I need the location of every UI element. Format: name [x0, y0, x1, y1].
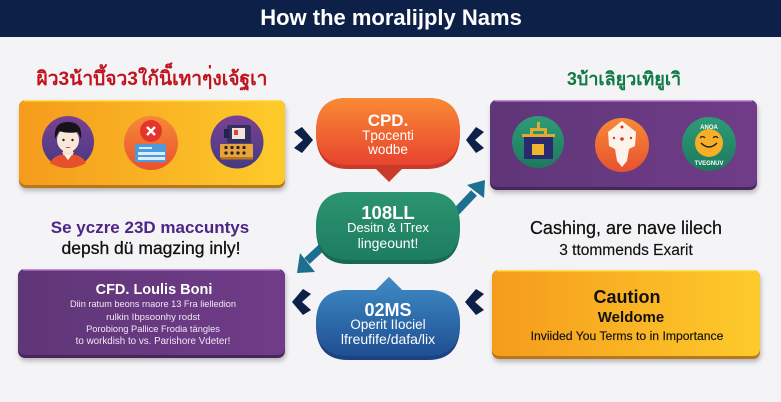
- icon: green shrine box: [512, 116, 564, 168]
- panel: lower right yellow caution: Inviided You Terms to in Importance: [531, 329, 724, 343]
- arrow: down left teal: [297, 247, 322, 273]
- bubble: blue 02MS: lfreufife/dafa/lix: [341, 331, 435, 347]
- heading: top right: 3บ้าเลิยูวเทิยูเาิ: [567, 69, 681, 91]
- panel: lower right yellow caution: [492, 270, 760, 359]
- bubble: orange CPD: wodbe: [367, 142, 408, 157]
- header bar with title: [0, 0, 781, 37]
- panel: top right purple with icons: [490, 100, 757, 190]
- panel: lower left purple: Porobiong Pallice Frodia tängles: [86, 324, 220, 334]
- icon: person: [42, 116, 94, 168]
- panel: lower left purple: rulkin Ibpsoonhy rodst: [106, 312, 200, 323]
- panel: lower left purple: to workdish to vs. Parishore Vdeter!: [76, 336, 230, 347]
- text block: lower right heading: [530, 218, 722, 259]
- bubble: green 108LL: Desitn & ITrex: [347, 220, 429, 235]
- arrow: lower right chevron: [465, 289, 484, 315]
- text block: lower left heading: depsh dü magzing inly!: [62, 238, 240, 258]
- icon: machine: [210, 116, 264, 168]
- heading: top left: ผิว3น้าบึ้จว3ใก้นิ็เทาๆ่งเจ้ฐเา: [36, 62, 267, 92]
- bubble: blue 02MS: Operit IIociel: [350, 317, 426, 332]
- bubble: orange CPD: Tpocenti: [362, 128, 414, 143]
- arrow: top right chevron: [466, 127, 484, 153]
- panel: lower left purple: CFD. Loulis Boni: [96, 282, 212, 298]
- icon: error card: [124, 116, 178, 170]
- arrow: lower left chevron: [292, 289, 311, 315]
- icon: smiley badge: ANOA: [700, 125, 718, 131]
- panel: lower left purple: Diin ratum beons rnaore 13 Fra lielledion: [70, 299, 236, 309]
- icon: smiley badge: TVEGNUV: [694, 161, 724, 167]
- icon: smiley badge: [682, 117, 736, 171]
- bubble: orange CPD: [316, 98, 460, 182]
- panel: lower right yellow caution: Weldome: [598, 309, 664, 326]
- text block: lower right heading: Cashing, are nave lilech: [530, 218, 722, 238]
- panel: lower right yellow caution: Caution: [594, 287, 660, 307]
- arrow: up right teal: [456, 180, 485, 212]
- header bar with title: How the moralijply Nams: [260, 5, 522, 30]
- bubble: green 108LL: 108LL: [361, 202, 415, 223]
- bubble: green 108LL: lingeount!: [358, 235, 418, 251]
- bubble: orange CPD: CPD.: [368, 111, 408, 130]
- bubble: blue 02MS: [316, 277, 460, 360]
- bubble: green 108LL: [316, 192, 460, 264]
- text block: lower right heading: 3 ttommends Exarit: [559, 242, 693, 259]
- text block: lower left heading: [51, 218, 249, 258]
- bubble: blue 02MS: 02MS: [364, 300, 412, 320]
- panel: top left yellow with icons: [19, 100, 285, 188]
- text block: lower left heading: Se yczre 23D maccuntys: [51, 218, 249, 237]
- arrow: top left chevron: [294, 127, 313, 153]
- icon: orange white figure: [595, 118, 649, 172]
- panel: lower left purple: [18, 269, 285, 358]
